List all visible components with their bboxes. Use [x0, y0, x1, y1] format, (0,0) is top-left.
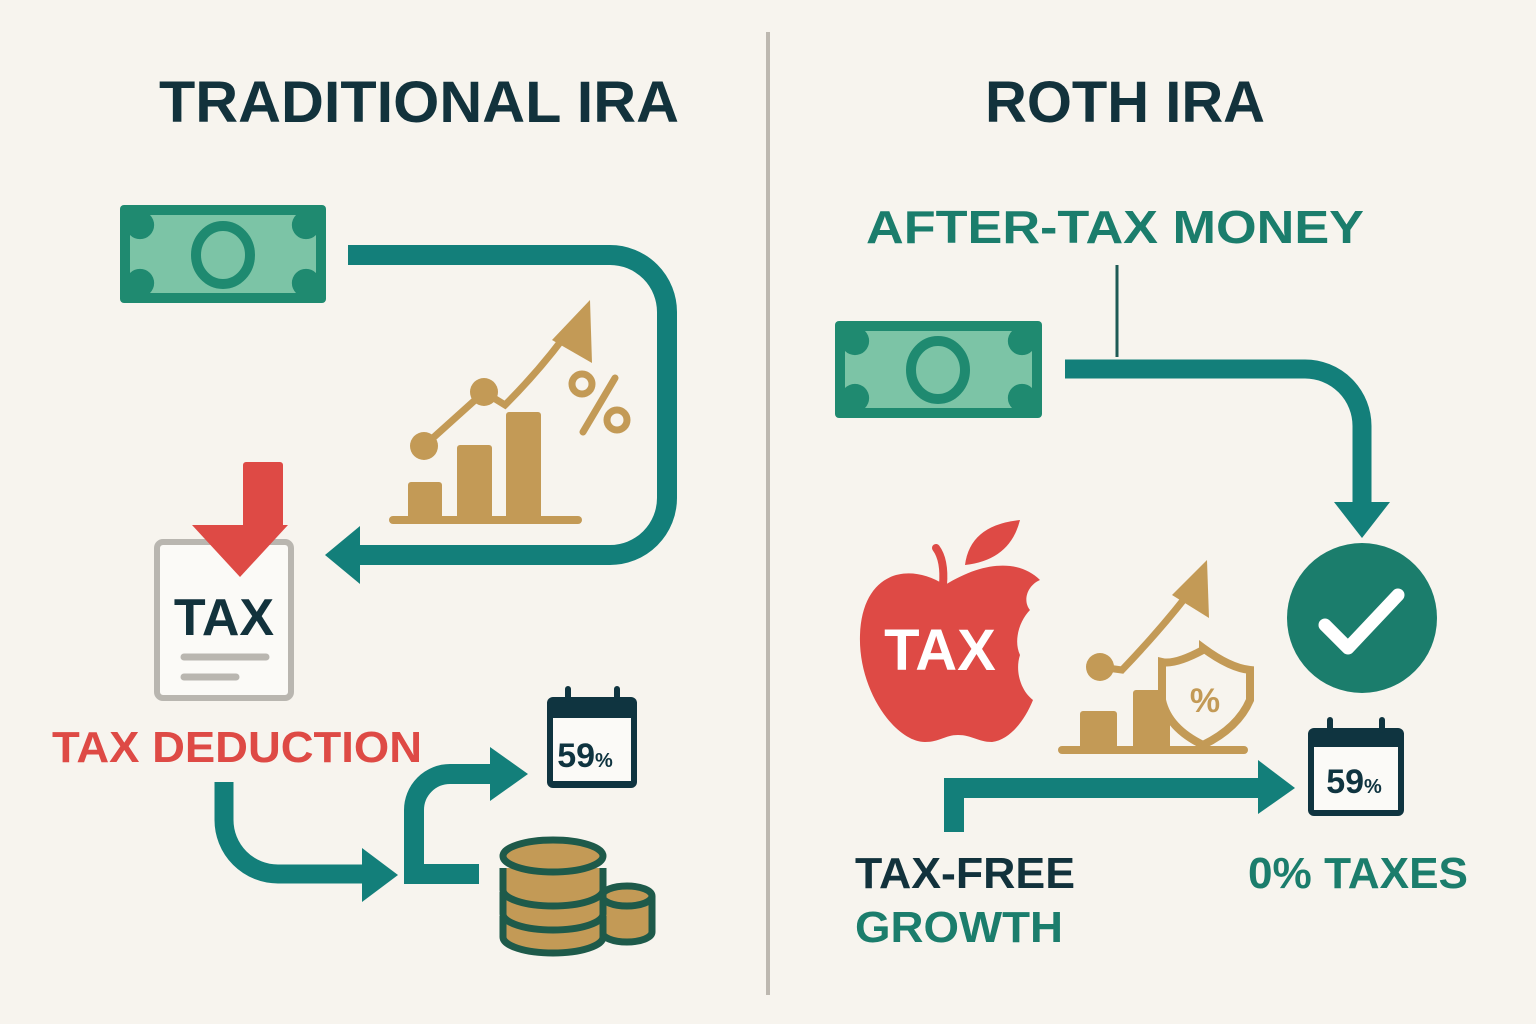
label: tax-free growth: [855, 849, 1075, 952]
icon: tax apple: TAX: [884, 618, 996, 683]
icon: growth chart: [393, 300, 627, 522]
icon: calendar 59 left: 59%: [557, 737, 613, 775]
label: tax-free growth: TAX-FREE: [855, 849, 1075, 898]
title: traditional IRA: TRADITIONAL IRA: [159, 70, 679, 135]
icon: calendar 59 right: [1308, 717, 1404, 816]
arrow: deduction to coins: [224, 782, 398, 902]
icon: check circle: [1287, 543, 1437, 693]
label: tax deduction: TAX DEDUCTION: [52, 723, 422, 772]
icon: calendar 59 right: 59%: [1326, 763, 1382, 801]
icon: tax document with red down arrow: [157, 462, 291, 698]
arrow: coins to age 59: [414, 747, 528, 874]
icon: calendar 59 left: [547, 686, 637, 788]
icon: tax document with red down arrow: TAX: [174, 589, 274, 647]
icon: left dollar bill: [120, 205, 326, 303]
label: 0% taxes: 0% TAXES: [1248, 849, 1468, 898]
icon: growth chart with shield: %: [1190, 682, 1220, 720]
label: after-tax money: AFTER-TAX MONEY: [866, 201, 1364, 253]
icon: percent sign: [572, 374, 627, 432]
arrow: bill to tax document loop: [325, 255, 667, 584]
icon: tax apple: [860, 520, 1040, 742]
icon: right dollar bill: [835, 321, 1042, 418]
arrow: tax-free growth to 59: [954, 760, 1295, 832]
icon: growth chart with shield: [1062, 560, 1250, 751]
title: roth IRA: ROTH IRA: [985, 70, 1265, 135]
icon: coin stack: [503, 840, 652, 953]
arrow: money to check: [1065, 369, 1390, 538]
label: tax-free growth: GROWTH: [855, 903, 1063, 952]
